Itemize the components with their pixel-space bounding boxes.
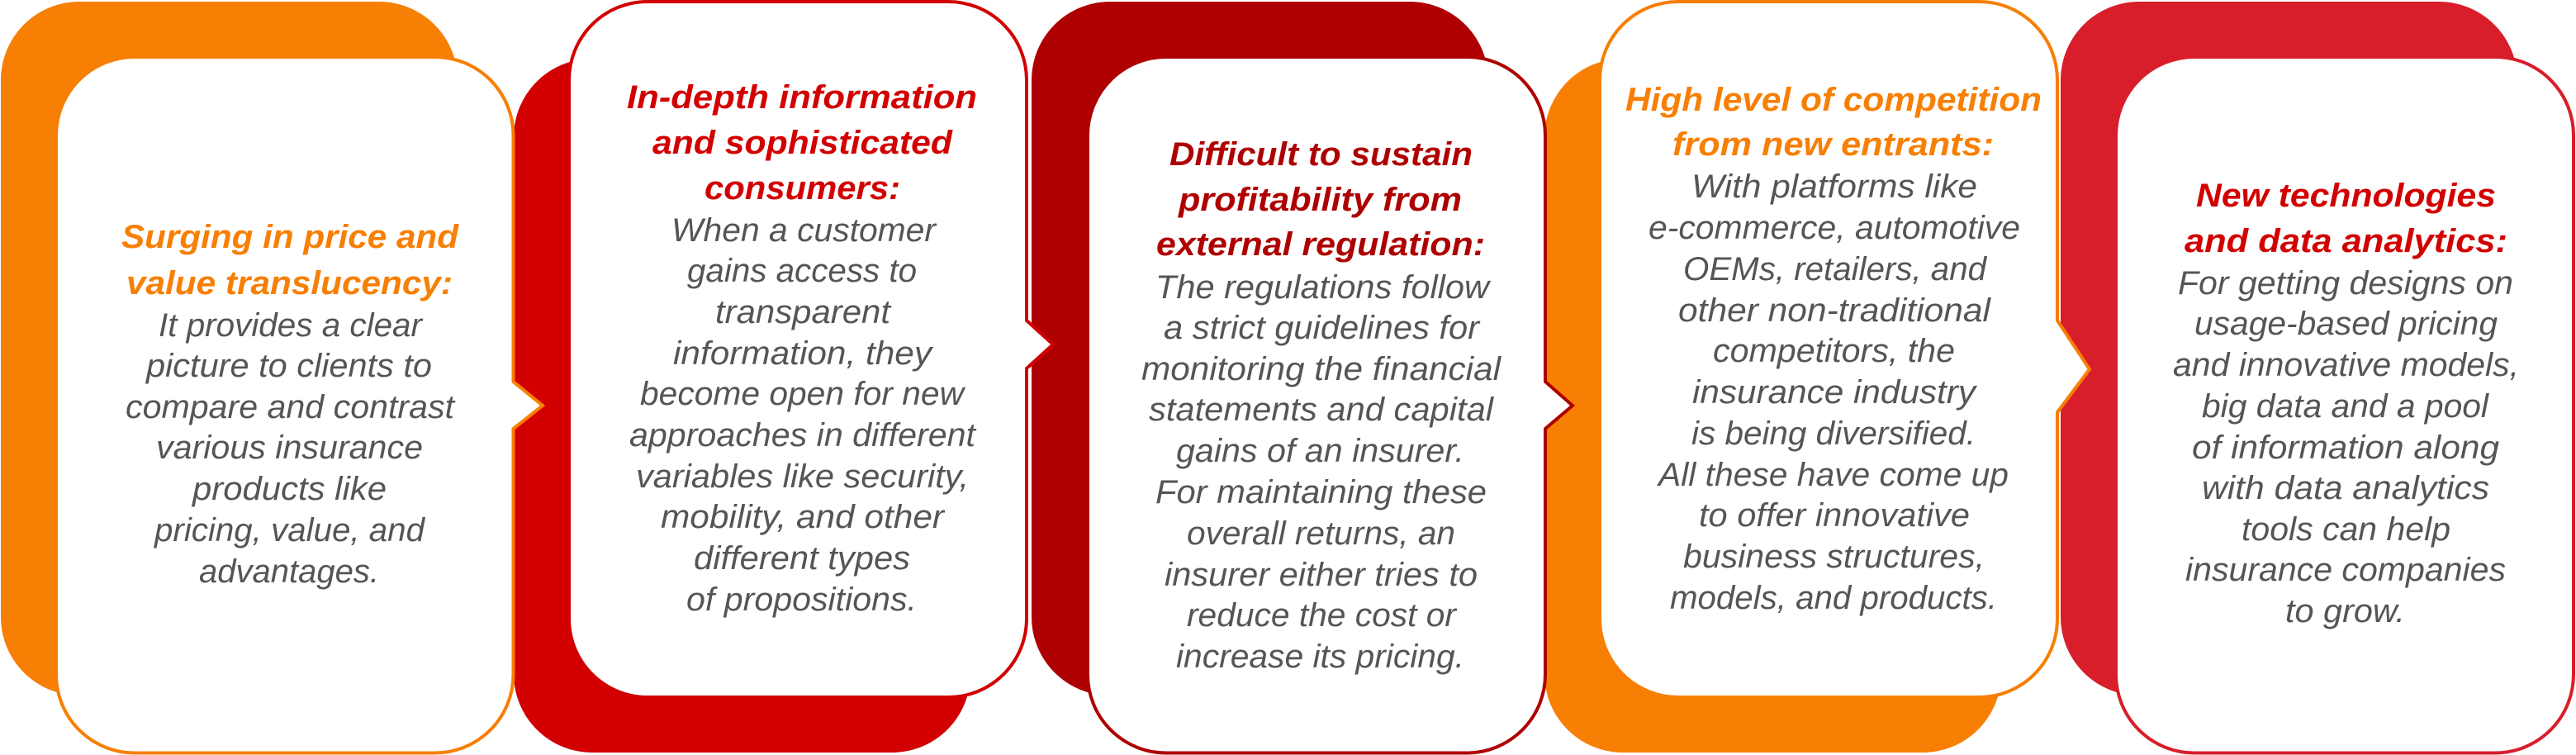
body text: statements and capital	[1149, 392, 1494, 428]
heading: from new entrants:	[1672, 126, 1994, 163]
body text: It provides a clear	[159, 307, 424, 344]
body text: insurance industry	[1692, 374, 1978, 411]
body text: OEMs, retailers, and	[1683, 251, 1988, 287]
body text	[1649, 169, 2020, 616]
body text: a strict guidelines for	[1164, 310, 1481, 346]
body text: models, and products.	[1670, 580, 1997, 616]
card: white bubble with arrow notch	[1088, 57, 1573, 753]
heading	[121, 219, 460, 302]
card: white bubble with arrow notch	[569, 2, 1053, 697]
panel: high level of competition	[1544, 2, 2090, 753]
body text: products like	[192, 471, 387, 507]
heading: New technologies	[2196, 178, 2496, 214]
card: white bubble with arrow notch	[1600, 2, 2090, 697]
back shape: red	[2061, 2, 2517, 696]
body text: of propositions.	[686, 582, 917, 618]
body text: variables like security,	[636, 458, 969, 495]
body text: advantages.	[199, 553, 379, 590]
body text: compare and contrast	[126, 389, 456, 425]
body text: For getting designs on	[2178, 265, 2513, 302]
body text: big data and a pool	[2202, 388, 2489, 425]
panel: surging in price and value translucency	[1, 2, 543, 753]
body text: With platforms like	[1691, 169, 1977, 205]
back shape: orange	[1544, 59, 2001, 753]
body text: to grow.	[2285, 593, 2405, 629]
body text: approaches in different	[629, 417, 977, 453]
card: white bubble with arrow notch	[56, 57, 543, 753]
body text: mobility, and other	[661, 499, 946, 535]
body text: All these have come up	[1657, 457, 2009, 493]
body text	[126, 307, 456, 590]
panel: in-depth information and sophisticated consumers	[514, 2, 1053, 753]
body text: other non-traditional	[1678, 292, 1991, 329]
body text: increase its pricing.	[1176, 639, 1464, 675]
body text: insurance companies	[2185, 552, 2506, 588]
heading: Difficult to sustain	[1169, 136, 1473, 173]
body text: insurer either tries to	[1165, 557, 1478, 593]
body text: gains of an insurer.	[1176, 433, 1464, 469]
heading: High level of competition	[1625, 82, 2042, 118]
body text	[1141, 269, 1501, 675]
body text: different types	[694, 540, 910, 577]
body text: picture to clients to	[145, 348, 432, 384]
body text: information, they	[673, 335, 934, 372]
body text: overall returns, an	[1187, 515, 1455, 552]
heading	[1625, 82, 2042, 163]
heading: and sophisticated	[652, 125, 954, 161]
body text: transparent	[715, 294, 892, 330]
body text: reduce the cost or	[1187, 597, 1458, 634]
heading: consumers:	[704, 170, 900, 207]
body text	[2173, 265, 2519, 629]
body text: various insurance	[156, 430, 423, 466]
heading: external regulation:	[1156, 226, 1485, 263]
body text: competitors, the	[1713, 333, 1955, 369]
body text: monitoring the financial	[1141, 351, 1501, 387]
body text: with data analytics	[2202, 470, 2489, 506]
heading: Surging in price and	[121, 219, 460, 255]
body text: become open for new	[640, 376, 966, 412]
heading	[2185, 178, 2507, 259]
panel: difficult to sustain profitability	[1032, 2, 1573, 753]
heading: In-depth information	[627, 79, 977, 116]
body text: is being diversified.	[1691, 415, 1976, 452]
body text: business structures,	[1683, 539, 1985, 575]
panel: new technologies and data analytics	[2061, 2, 2574, 753]
body text	[629, 212, 977, 618]
heading: profitability from	[1178, 182, 1462, 218]
card: white bubble	[2116, 57, 2574, 753]
body text: and innovative models,	[2173, 347, 2519, 383]
heading	[627, 79, 977, 207]
body text: e-commerce, automotive	[1649, 210, 2020, 246]
body text: of information along	[2192, 430, 2499, 466]
body text: The regulations follow	[1155, 269, 1492, 306]
back shape: red	[514, 59, 970, 753]
body text: pricing, value, and	[154, 512, 426, 548]
body text: to offer innovative	[1699, 497, 1970, 534]
heading: and data analytics:	[2185, 223, 2507, 259]
body text: For maintaining these	[1155, 474, 1487, 510]
heading: value translucency:	[126, 265, 453, 302]
body text: usage-based pricing	[2194, 306, 2498, 342]
body text: gains access to	[687, 253, 917, 289]
back shape: orange	[1, 2, 458, 696]
back shape: dark red	[1032, 2, 1488, 696]
body text: tools can help	[2242, 511, 2450, 548]
heading	[1156, 136, 1485, 263]
body text: When a customer	[671, 212, 937, 249]
